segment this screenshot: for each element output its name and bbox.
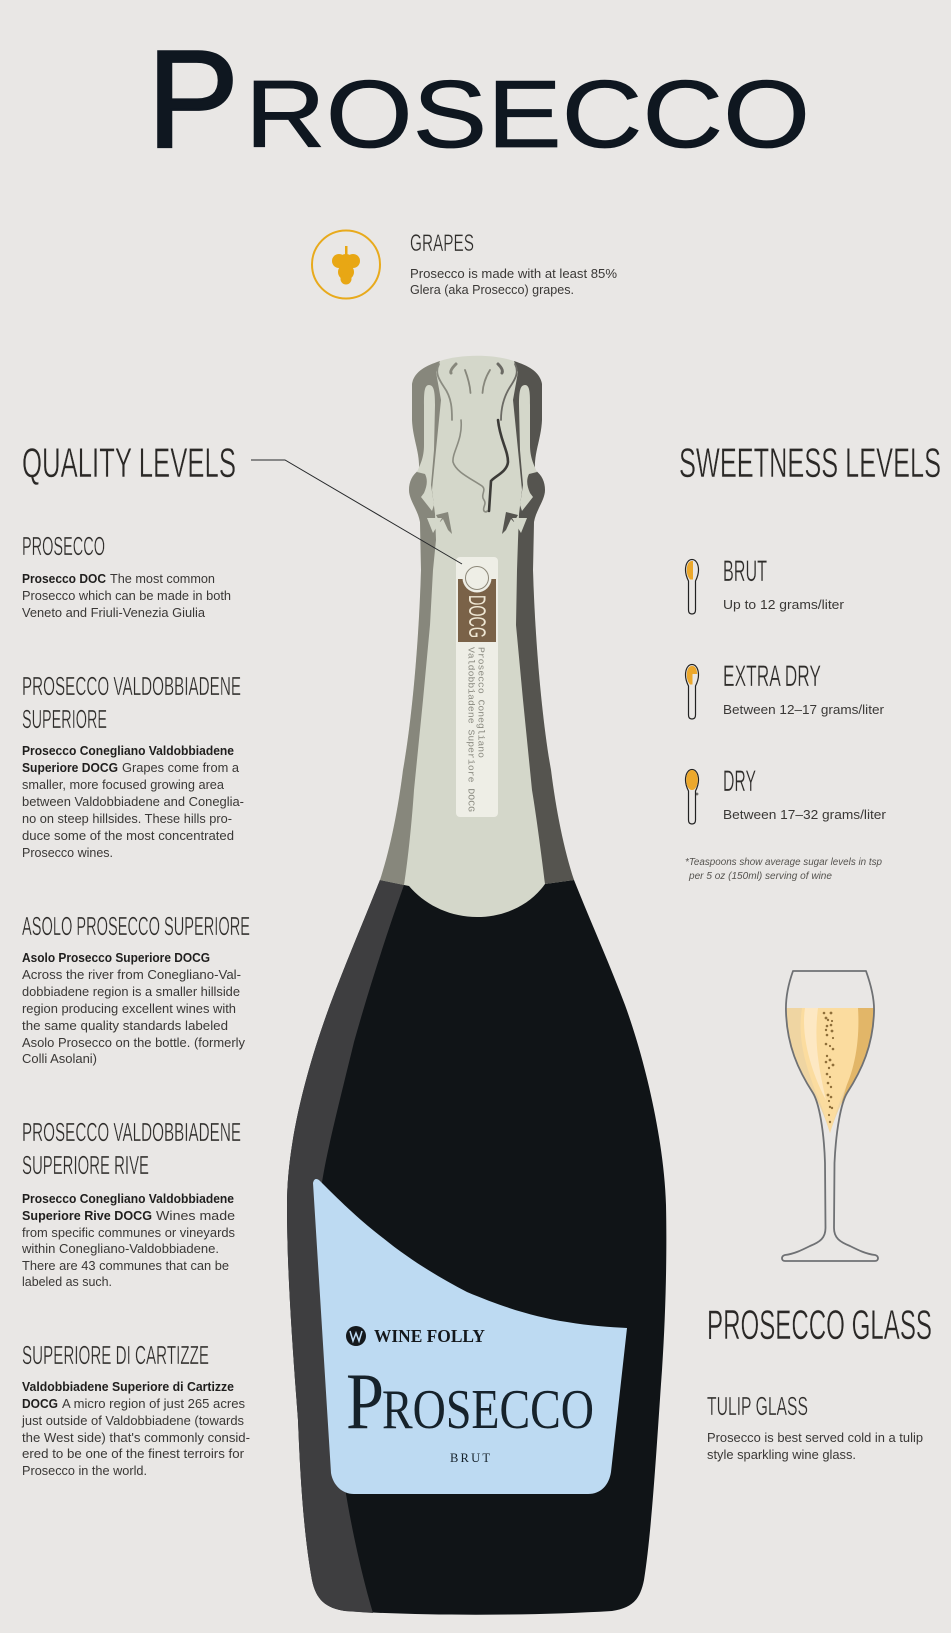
capsule foil folds [437,364,517,512]
level: brut: BRUT [723,555,767,588]
bubbles [823,1012,834,1123]
level: extra dry: Between 12–17 grams/liter [723,702,885,717]
title: P [147,22,239,177]
level: superiore di cartizze: Prosecco in the world. [22,1463,147,1478]
capsule left shade [380,361,452,885]
level: prosecco: Prosecco DOC [22,571,107,586]
capsule light tabs [417,385,537,533]
DOCG seal text: DOCG [463,595,490,638]
panel: grapes [312,230,617,298]
level: prosecco: Veneto and Friuli-Venezia Giulia [22,605,206,620]
level: asolo prosecco superiore: region producing excellent wines with [22,1001,236,1016]
footnote [685,857,882,882]
level: prosecco valdobbiadene superiore rive [21,1117,241,1289]
level: prosecco: Prosecco which can be made in both [22,588,231,603]
icon: wine folly logo [346,1326,366,1346]
icon: brut spoon [686,560,698,614]
footnote: per 5 oz (150ml) serving of wine [688,871,832,882]
title [147,22,810,177]
level: prosecco valdobbiadene superiore: PROSECCO VALDOBBIADENE [22,671,241,701]
glass outline [782,971,878,1261]
title: ROSECCO [245,61,810,168]
capsule base [380,356,574,917]
wine in glass [786,1008,874,1133]
grapes text [410,266,617,297]
glass description: style sparkling wine glass. [707,1447,856,1462]
bottle [251,356,666,1615]
level: prosecco [22,531,231,620]
level: prosecco: PROSECCO [22,531,105,561]
level: prosecco valdobbiadene superiore rive: There are 43 communes that can be [22,1258,229,1273]
level: asolo prosecco superiore: ASOLO PROSECCO SUPERIORE [22,911,250,941]
level: extra dry: EXTRA DRY [723,660,821,693]
level: dry: DRY [723,765,756,798]
panel: prosecco glass [707,971,932,1462]
level: dry: Between 17–32 grams/liter [723,807,887,822]
label title: P [346,1358,384,1446]
footnote: *Teaspoons show average sugar levels in tsp [685,857,882,868]
bottle highlight [287,880,404,1613]
level: prosecco valdobbiadene superiore: smaller, more focused growing area [22,777,225,792]
level: prosecco valdobbiadene superiore rive: Wines made [156,1208,235,1223]
level: asolo prosecco superiore: Asolo Prosecco Superiore DOCG [22,950,210,965]
level: prosecco valdobbiadene superiore: Prosecco Conegliano Valdobbiadene [22,743,234,758]
level: prosecco valdobbiadene superiore [22,671,244,860]
level: brut: Up to 12 grams/liter [723,597,845,612]
level: prosecco valdobbiadene superiore: between Valdobbiadene and Coneglia- [22,794,244,809]
icon: grapes [312,230,380,298]
neck label text: Prosecco Conegliano [476,647,486,758]
quality levels heading: QUALITY LEVELS [22,439,236,486]
icon: tulip glass [782,971,878,1261]
glass description [707,1430,923,1462]
glass description: Prosecco is best served cold in a tulip [707,1430,923,1445]
level: asolo prosecco superiore: the same quality standards labeled [22,1018,228,1033]
capsule right shade [502,361,574,884]
grapes heading: GRAPES [410,230,474,257]
level: prosecco valdobbiadene superiore rive: Prosecco Conegliano Valdobbiadene [22,1191,234,1206]
level: superiore di cartizze: just outside of Valdobbiadene (towards [21,1413,244,1428]
level: asolo prosecco superiore: Colli Asolani) [22,1051,97,1066]
level: prosecco valdobbiadene superiore rive: within Conegliano-Valdobbiadene. [21,1241,219,1256]
grapes text: Glera (aka Prosecco) grapes. [410,282,574,297]
capsule [380,356,574,917]
level: prosecco valdobbiadene superiore: no on steep hillsides. These hills pro- [22,811,232,826]
panel: sweetness levels [679,439,941,882]
label title: ROSECCO [382,1379,594,1441]
icon: dry spoon [686,770,698,824]
level: superiore di cartizze: SUPERIORE DI CARTIZZE [22,1340,209,1370]
tulip glass subheading: TULIP GLASS [707,1391,808,1421]
level: asolo prosecco superiore [22,911,250,1066]
level: prosecco valdobbiadene superiore rive: PROSECCO VALDOBBIADENE [22,1117,241,1147]
leader line [251,460,462,564]
level: prosecco valdobbiadene superiore: duce some of the most concentrated [22,828,234,843]
neck label [456,557,498,817]
level: superiore di cartizze [21,1340,250,1478]
brand name: WINE FOLLY [374,1326,485,1346]
level: prosecco valdobbiadene superiore rive: from specific communes or vineyards [22,1225,235,1240]
level: brut [686,555,845,614]
label subtitle: BRUT [450,1451,490,1465]
level: prosecco valdobbiadene superiore: Superiore DOCG [22,760,118,775]
level: asolo prosecco superiore: Across the river from Conegliano-Val- [22,967,241,982]
neck label text: Valdobbiadene Superiore DOCG [466,647,476,812]
level: asolo prosecco superiore: Asolo Prosecco on the bottle. (formerly [22,1035,245,1050]
level: prosecco valdobbiadene superiore rive: labeled as such. [22,1274,112,1289]
level: superiore di cartizze: A micro region of just 265 acres [62,1396,245,1411]
panel: quality levels [21,439,250,1478]
level: prosecco valdobbiadene superiore: SUPERIORE [22,704,107,734]
level: superiore di cartizze: DOCG [22,1396,58,1411]
level: superiore di cartizze: ered to be one of the finest terroirs for [22,1446,245,1461]
level: superiore di cartizze: the West side) that's commonly consid- [22,1430,250,1445]
neck label text [466,647,486,812]
bottle body [287,880,666,1615]
level: extra dry [686,660,885,719]
level: dry [686,765,887,824]
grapes text: Prosecco is made with at least 85% [410,266,617,281]
level: prosecco valdobbiadene superiore rive: SUPERIORE RIVE [22,1150,149,1180]
level: prosecco valdobbiadene superiore: Grapes come from a [122,760,240,775]
icon: extra dry spoon [686,664,698,719]
label title [346,1358,594,1446]
bottle label [313,1179,627,1494]
level: prosecco valdobbiadene superiore rive: Superiore Rive DOCG [22,1208,152,1223]
level: prosecco valdobbiadene superiore: Prosecco wines. [22,845,113,860]
level: asolo prosecco superiore: dobbiadene region is a smaller hillside [22,984,240,999]
level: prosecco: The most common [110,571,215,586]
level: superiore di cartizze: Valdobbiadene Superiore di Cartizze [22,1379,234,1394]
